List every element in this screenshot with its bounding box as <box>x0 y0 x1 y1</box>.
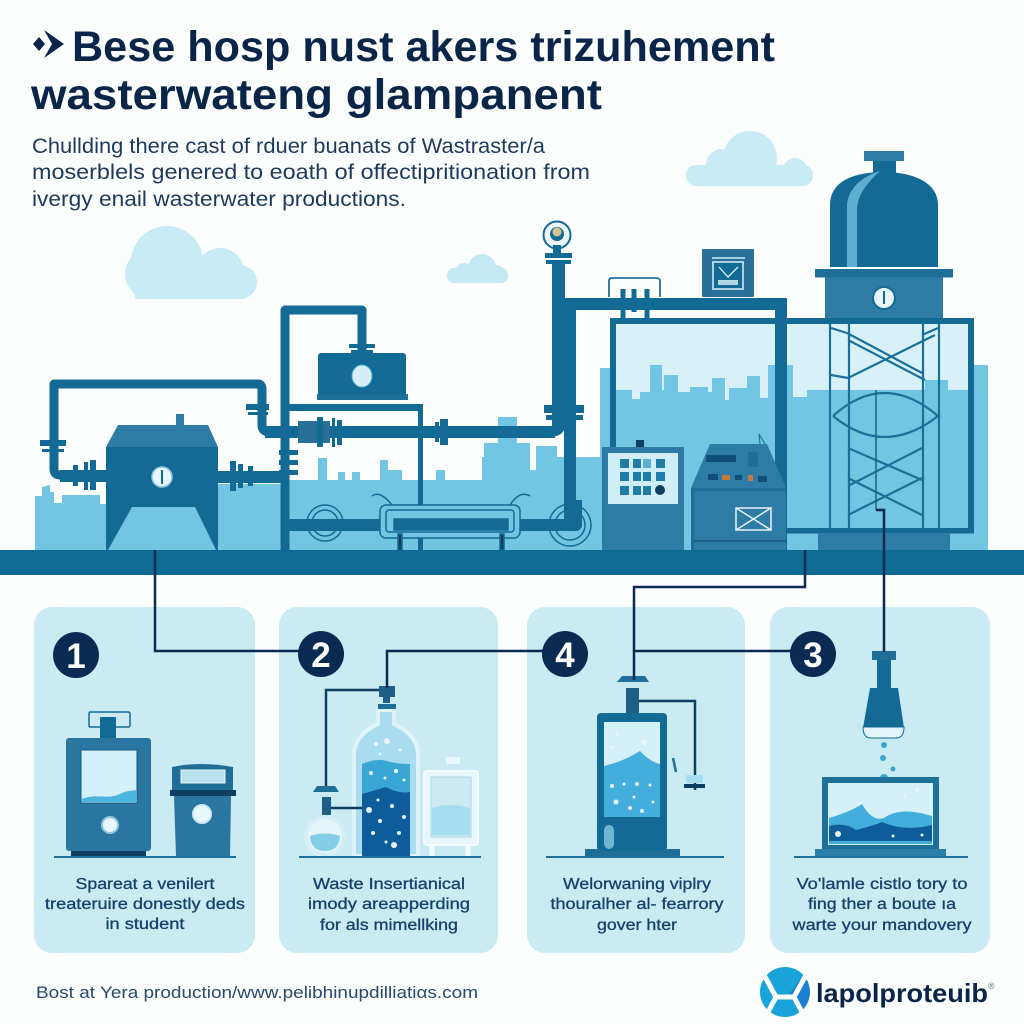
ground line <box>546 856 724 858</box>
badge 2 <box>298 631 344 677</box>
ground line <box>299 856 481 858</box>
title line one: Bese hosp nust akers trizuhement <box>72 23 775 71</box>
base under tower <box>818 533 950 550</box>
icon: spray nozzle <box>863 651 904 738</box>
badge 2: 2 <box>311 636 331 675</box>
tower lattice <box>830 324 939 528</box>
caption 2: for als mimellking <box>320 917 458 934</box>
ground band <box>0 550 1024 575</box>
caption 1 <box>45 876 245 933</box>
bubbles <box>610 732 654 813</box>
machine gauge <box>152 467 172 487</box>
badge 4 <box>542 631 588 677</box>
treatment hall frame <box>610 318 974 534</box>
caption 2: Waste Insertianical <box>313 876 465 893</box>
cloud: large left <box>125 226 257 299</box>
cabinet icon grid <box>620 459 665 495</box>
cloud: small centre <box>447 254 508 283</box>
icon: filter unit <box>66 712 151 857</box>
caption 1: Spareat a venilert <box>76 876 215 893</box>
panel 4 <box>770 607 990 953</box>
title line two: wasterwateng glampanent <box>30 71 602 119</box>
panel 1 <box>34 607 255 953</box>
caption 1: treateruire donestly deds <box>45 896 245 913</box>
panel 3 <box>527 607 745 953</box>
bubbles <box>366 738 406 848</box>
badge 1 <box>53 632 99 678</box>
registered mark: ® <box>988 981 995 991</box>
footer source text: Bost at Yera production/www.pelibhinupdilliatiαs.com <box>36 984 478 1002</box>
badge 1: 1 <box>66 637 86 676</box>
flame badge <box>352 365 372 387</box>
icon: title arrow <box>33 30 64 58</box>
caption 1: in student <box>106 916 185 933</box>
pipe: upper run to hall <box>570 278 781 550</box>
logo <box>760 967 995 1017</box>
icon: filtration column <box>585 676 705 857</box>
dome highlight <box>847 171 880 267</box>
title <box>30 23 775 119</box>
icon: flask <box>306 690 379 855</box>
tank collar <box>815 269 953 278</box>
intro text block <box>32 134 590 211</box>
caption 4 <box>791 876 972 934</box>
intro text block: moserblels genered to eoath of offectipritionation from <box>32 160 590 184</box>
icon: beaker on stand <box>424 757 478 856</box>
main water tank tower <box>815 151 953 528</box>
badge 3 <box>790 631 836 677</box>
column valve <box>617 676 649 682</box>
badge 3: 3 <box>803 636 823 675</box>
pipe: left loop and central line <box>54 310 576 550</box>
water droplets <box>873 742 896 810</box>
caption 3: Welorwaning viplry <box>563 876 711 893</box>
tank base block <box>825 277 943 318</box>
caption 4: fing ther a boute ıa <box>808 896 956 913</box>
tank cap <box>864 151 904 161</box>
panel 2 <box>279 607 498 953</box>
badge 4: 4 <box>555 636 575 675</box>
caption 2 <box>308 876 470 934</box>
heat exchanger and wheels <box>307 494 591 550</box>
caption 4: warte your mandovery <box>791 917 972 934</box>
small tank on stand <box>317 353 408 400</box>
pipe flanges and valves <box>40 344 448 491</box>
control cabinet <box>602 440 684 550</box>
control box on pipe <box>702 249 754 297</box>
tank dome <box>830 172 938 267</box>
bottle valve <box>379 686 395 697</box>
dosing cabinet controls <box>706 452 767 482</box>
pressure gauge <box>544 222 570 253</box>
ground line <box>794 856 968 858</box>
logo wordmark: lapolproteuib <box>816 978 988 1008</box>
caption 4: Vo'lamle cistlo tory to <box>796 876 968 893</box>
city skyline background <box>35 365 988 550</box>
icon: meter bin <box>170 764 236 856</box>
treatment hall glass <box>613 321 971 411</box>
caption 3: thouralher al- fearrory <box>550 896 724 913</box>
caption 2: imody areapperding <box>308 896 470 913</box>
feed pump machine <box>106 414 218 550</box>
tank gauge <box>873 287 895 309</box>
connector lines <box>155 510 884 688</box>
intro text block: ivergy enail wasterwater productions. <box>32 187 406 211</box>
icon: bottle tank <box>354 686 418 856</box>
logo mark <box>760 967 810 1017</box>
dosing cabinet <box>691 434 786 550</box>
envelope label <box>736 508 771 530</box>
caption 3 <box>550 876 724 934</box>
ground line <box>54 856 236 858</box>
icon: basin screen <box>815 777 946 856</box>
caption 3: gover hter <box>597 917 677 934</box>
equipment stand <box>289 404 423 550</box>
intro text block: Chullding there cast of rduer buanats of Wastraster/a <box>32 134 545 158</box>
tall vertical pipe with gauge <box>544 222 584 430</box>
cloud: upper right <box>686 131 813 186</box>
